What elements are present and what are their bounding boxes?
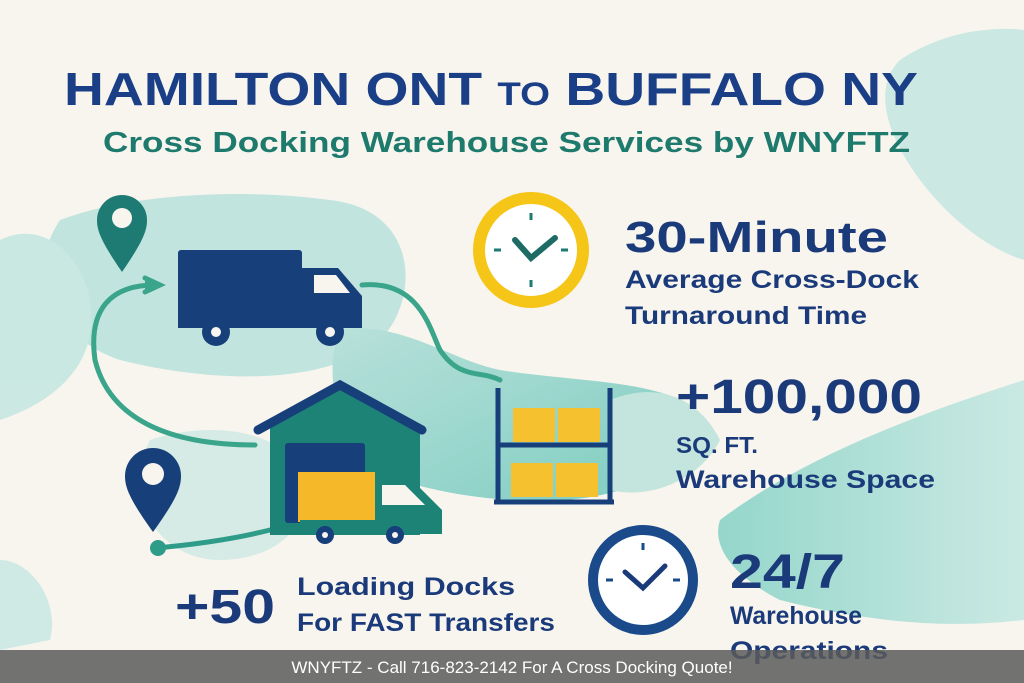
stat: 100,000 sq ft: SQ. FT.	[676, 432, 758, 458]
footer bar: WNYFTZ - Call 716-823-2142 For A Cross Docking Quote!	[291, 658, 733, 677]
icon: warehouse with truck	[258, 385, 442, 544]
stat: 100,000 sq ft: Warehouse Space	[676, 466, 935, 494]
stat: 30-minute	[625, 213, 919, 330]
stat: 30-minute: Turnaround Time	[625, 302, 867, 330]
stat: 24/7: Warehouse	[730, 602, 862, 630]
icon: clock yellow	[479, 198, 583, 302]
title: HAMILTON ONT TO BUFFALO NY	[64, 63, 918, 115]
stat: 24/7	[730, 546, 888, 665]
icon: shelf with boxes	[494, 388, 614, 502]
stat: 24/7: Operations	[730, 637, 888, 665]
stat: 50 loading docks: +50	[175, 581, 275, 634]
stat: 100,000 sq ft	[676, 371, 935, 494]
subtitle: Cross Docking Warehouse Services by WNYFTZ	[103, 127, 910, 159]
stat: 30-minute: 30-Minute	[625, 213, 888, 262]
icon: truck	[178, 250, 362, 346]
stat: 30-minute: Average Cross-Dock	[625, 266, 919, 294]
icon: location pin teal	[97, 195, 147, 272]
stat: 24/7: 24/7	[730, 546, 845, 599]
icon: clock navy	[593, 530, 693, 630]
footer bar	[0, 650, 1024, 683]
icon: location pin navy	[125, 448, 181, 532]
stat: 50 loading docks: For FAST Transfers	[297, 609, 555, 637]
route path arrow	[94, 278, 500, 556]
stat: 50 loading docks: Loading Docks	[297, 573, 515, 601]
stat: 50 loading docks	[175, 573, 555, 637]
stat: 100,000 sq ft: +100,000	[676, 371, 922, 424]
